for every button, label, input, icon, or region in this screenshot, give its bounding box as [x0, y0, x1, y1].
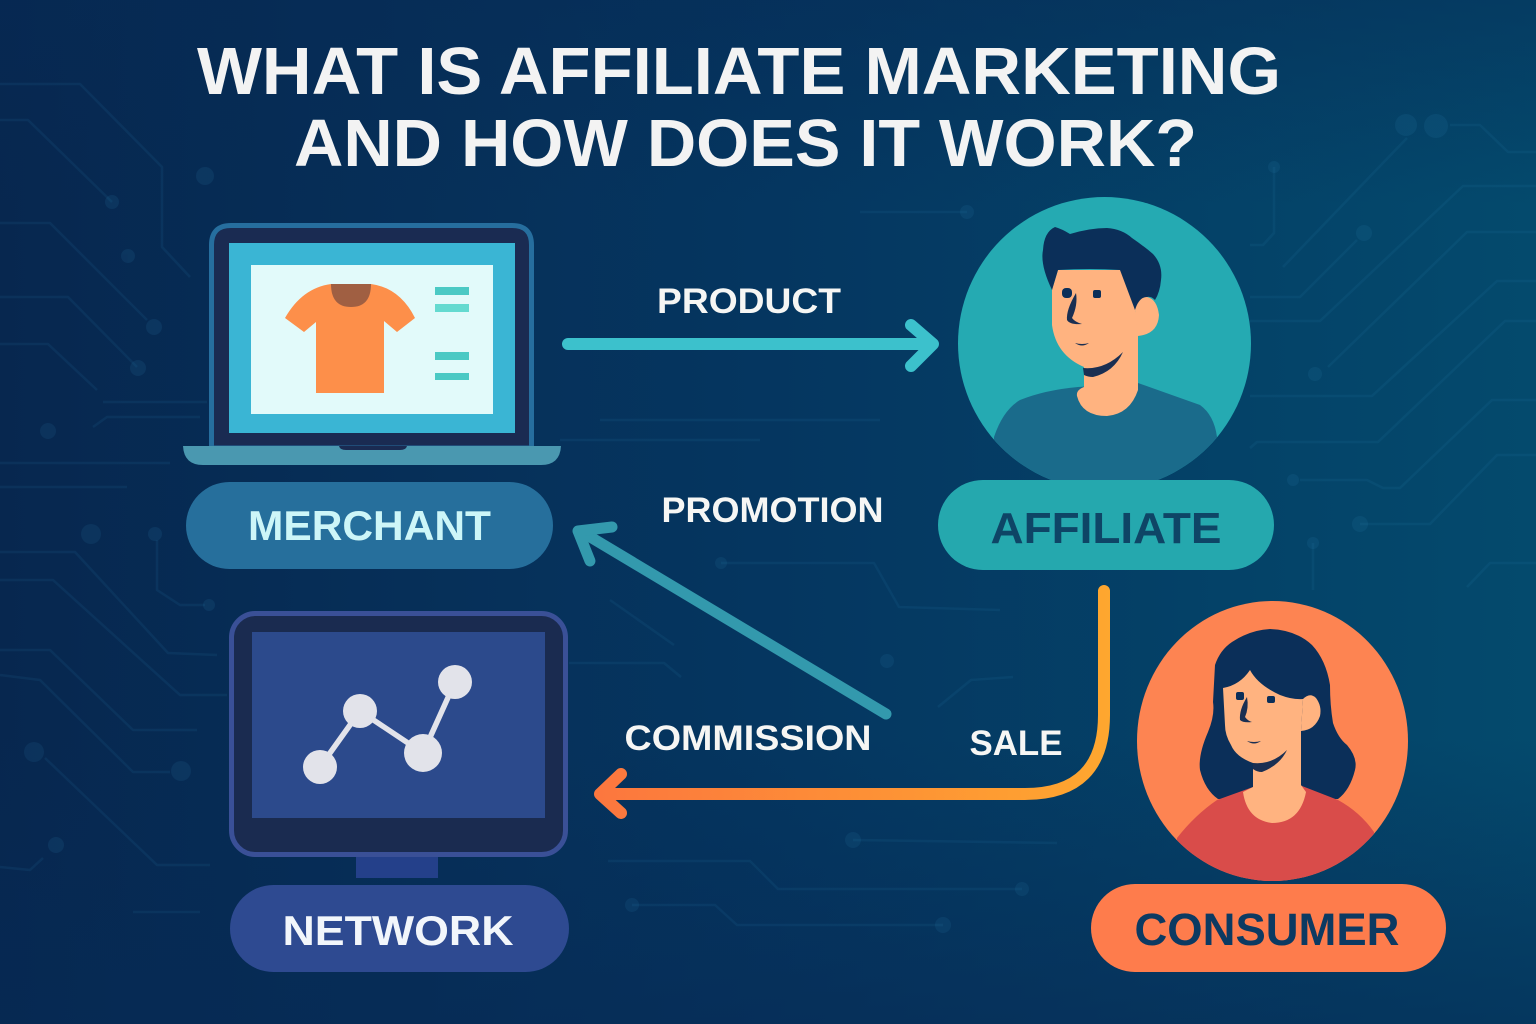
- label: network: NETWORK: [282, 907, 514, 954]
- affiliate ear: [1135, 297, 1159, 336]
- icon: consumer avatar: [1137, 601, 1408, 900]
- affiliate jaw shadow: [1083, 352, 1123, 377]
- label: merchant: MERCHANT: [248, 502, 491, 549]
- consumer neck and face: [1223, 670, 1306, 823]
- label: affiliate: [938, 480, 1274, 570]
- chart: network nodes: [303, 665, 472, 784]
- title: [197, 34, 1281, 181]
- label: consumer: [1091, 884, 1446, 972]
- icon: affiliate avatar: [958, 197, 1251, 500]
- affiliate neck and face: [1052, 270, 1138, 416]
- consumer nose and mouth: [1240, 697, 1261, 744]
- affiliate nose and mouth: [1067, 293, 1089, 346]
- icon: network monitor: [232, 614, 566, 878]
- arrow: sale and commission: [600, 591, 1104, 813]
- arrow: product: [568, 325, 933, 366]
- title: WHAT IS AFFILIATE MARKETING: [197, 34, 1281, 109]
- consumer shirt: [1177, 786, 1374, 881]
- label: merchant: [186, 482, 553, 569]
- title: AND HOW DOES IT WORK?: [294, 106, 1197, 181]
- label: product: PRODUCT: [657, 282, 841, 321]
- icon: merchant laptop: [183, 226, 561, 465]
- consumer ear: [1301, 695, 1320, 731]
- label: consumer: CONSUMER: [1134, 904, 1400, 955]
- affiliate eyes: [1062, 288, 1101, 298]
- label: promotion: PROMOTION: [662, 491, 884, 530]
- label: commission: COMMISSION: [624, 718, 872, 758]
- label: network: [230, 885, 569, 972]
- affiliate shirt: [994, 383, 1217, 480]
- arrow: promotion: [578, 527, 886, 714]
- consumer hair: [1200, 629, 1356, 799]
- label: sale: SALE: [970, 723, 1062, 763]
- consumer eyes: [1236, 692, 1275, 703]
- product detail bars: [435, 287, 469, 380]
- consumer jaw shadow: [1253, 750, 1287, 772]
- icon: t-shirt: [285, 284, 415, 393]
- label: affiliate: AFFILIATE: [990, 504, 1222, 553]
- affiliate hair: [1042, 227, 1161, 310]
